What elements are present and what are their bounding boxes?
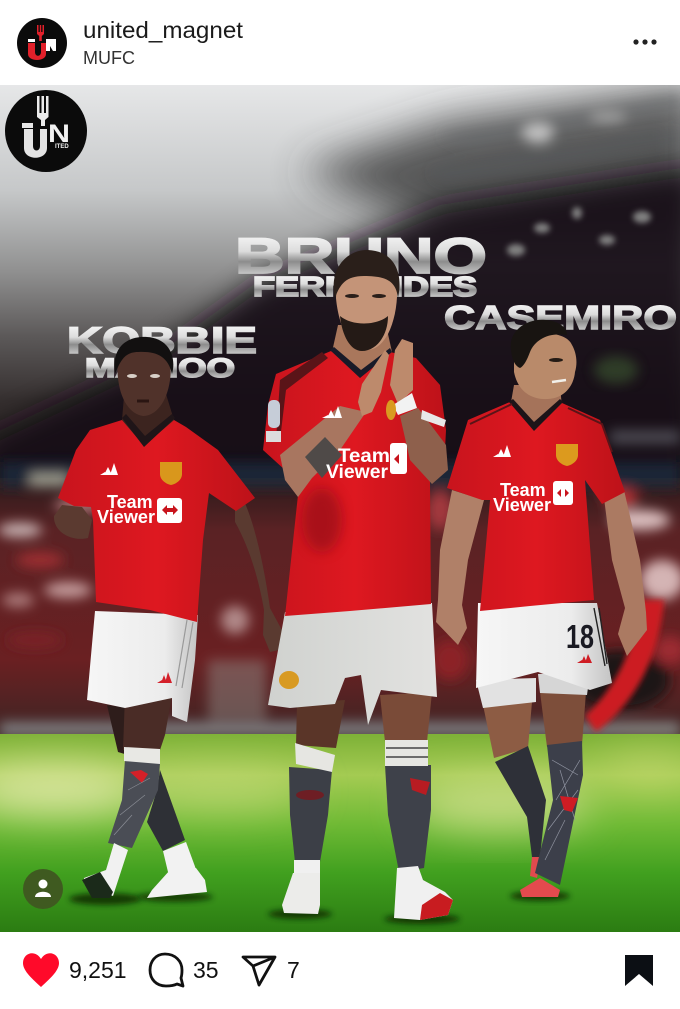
adidas shorts mark bbox=[577, 654, 592, 663]
sponsor text: Viewer bbox=[97, 507, 155, 527]
roof haze bbox=[300, 85, 680, 240]
red curved banner bbox=[585, 600, 664, 732]
crowd stand bbox=[0, 478, 680, 738]
shoulder stripes bbox=[470, 404, 612, 452]
head bbox=[514, 334, 576, 399]
sock stripes bbox=[295, 743, 335, 772]
logo badge: N bbox=[48, 120, 70, 148]
name: Kobbie Mainoo: MAINOO bbox=[85, 353, 235, 383]
dark upper stand bbox=[0, 165, 680, 500]
adidas mark bbox=[100, 463, 118, 475]
name: Bruno Fernandes: BRUNO bbox=[235, 228, 487, 284]
wristband bbox=[393, 393, 417, 415]
username: united_magnet bbox=[83, 17, 244, 43]
comment count: 35 bbox=[193, 957, 219, 983]
neck bbox=[122, 395, 174, 437]
icon: like heart bbox=[23, 953, 59, 987]
crest bbox=[556, 444, 578, 466]
shadow bbox=[268, 909, 332, 919]
white ankle socks bbox=[294, 860, 320, 874]
logo badge: ITED bbox=[55, 144, 69, 150]
sleeve patches bbox=[266, 400, 281, 442]
subtitle: MUFC bbox=[83, 48, 135, 68]
captain armband bbox=[421, 410, 446, 427]
neck bbox=[510, 385, 562, 434]
shoulder stripes bbox=[276, 352, 328, 440]
right sock bbox=[535, 741, 583, 885]
hair bbox=[114, 337, 173, 374]
sponsor text: Viewer bbox=[493, 495, 551, 515]
sock crest bbox=[560, 796, 578, 812]
logo badge bbox=[5, 90, 87, 172]
shorts crest bbox=[279, 671, 299, 689]
action bar bbox=[23, 953, 653, 987]
beard bbox=[340, 316, 388, 351]
torso shadow bbox=[302, 488, 342, 552]
boots bbox=[84, 843, 128, 896]
back boot bbox=[530, 857, 541, 878]
crest bbox=[160, 462, 182, 485]
name: Kobbie Mainoo: KOBBIE bbox=[67, 320, 257, 361]
arms bbox=[235, 497, 283, 652]
hands bbox=[358, 350, 389, 416]
name: Bruno Fernandes bbox=[238, 237, 486, 298]
sponsor text: Team bbox=[338, 446, 390, 467]
sponsor text: Team bbox=[107, 492, 153, 512]
front sock bbox=[108, 760, 160, 848]
adidas shorts mark bbox=[157, 672, 172, 683]
legs bbox=[483, 702, 532, 758]
name: Kobbie Mainoo bbox=[69, 326, 256, 378]
arms bbox=[436, 490, 484, 645]
left sock bbox=[495, 746, 546, 857]
stadium roof bbox=[516, 94, 680, 152]
head bbox=[336, 261, 397, 350]
shorts bbox=[268, 603, 437, 725]
sponsor text bbox=[326, 443, 407, 483]
name: Casemiro: CASEMIRO bbox=[444, 299, 677, 336]
comment bubble icon bbox=[150, 954, 183, 986]
player: Kobbie Mainoo bbox=[54, 337, 283, 905]
more menu icon bbox=[633, 39, 657, 45]
legs bbox=[107, 705, 124, 754]
front boot bbox=[520, 878, 560, 897]
face features bbox=[345, 294, 386, 298]
shirt bbox=[447, 402, 625, 611]
face features bbox=[549, 358, 566, 382]
head bbox=[118, 352, 171, 416]
shadow bbox=[69, 893, 141, 905]
pitch bbox=[0, 734, 680, 932]
sponsor text: Team bbox=[500, 480, 546, 500]
player: Bruno Fernandes bbox=[263, 250, 460, 924]
share count: 7 bbox=[287, 957, 300, 983]
player: Casemiro bbox=[436, 320, 647, 901]
legs bbox=[296, 700, 345, 748]
shirt bbox=[263, 351, 446, 616]
sponsor text: Viewer bbox=[326, 462, 389, 483]
hair bbox=[334, 250, 400, 298]
sponsor text bbox=[97, 495, 182, 523]
shirt number: 18 bbox=[566, 618, 594, 655]
collar bbox=[509, 399, 563, 431]
adidas mark bbox=[493, 445, 511, 457]
face features bbox=[127, 374, 160, 401]
profile avatar bbox=[17, 18, 67, 68]
shadow bbox=[510, 891, 570, 901]
boots bbox=[282, 873, 320, 914]
collar bbox=[330, 347, 392, 378]
tagged people icon bbox=[23, 869, 63, 909]
adidas mark bbox=[322, 406, 342, 418]
socks bbox=[289, 767, 332, 862]
shorts bbox=[87, 611, 198, 722]
shorts bbox=[476, 603, 612, 690]
collar bbox=[122, 414, 175, 447]
shirt bbox=[58, 420, 255, 622]
stand lights bbox=[507, 207, 651, 256]
name: Bruno Fernandes: FERNANDES bbox=[253, 271, 477, 302]
back sock bbox=[147, 770, 185, 851]
sponsor text bbox=[493, 480, 573, 515]
tattoo bbox=[305, 437, 342, 478]
hair bbox=[511, 320, 567, 368]
icon: bookmark bbox=[625, 955, 653, 986]
under shorts bbox=[476, 678, 536, 708]
post header bbox=[17, 17, 657, 68]
neck bbox=[332, 325, 392, 372]
icon: send arrow bbox=[243, 957, 275, 985]
crest bbox=[386, 400, 396, 420]
arms bbox=[280, 406, 366, 497]
like count: 9,251 bbox=[69, 957, 127, 983]
